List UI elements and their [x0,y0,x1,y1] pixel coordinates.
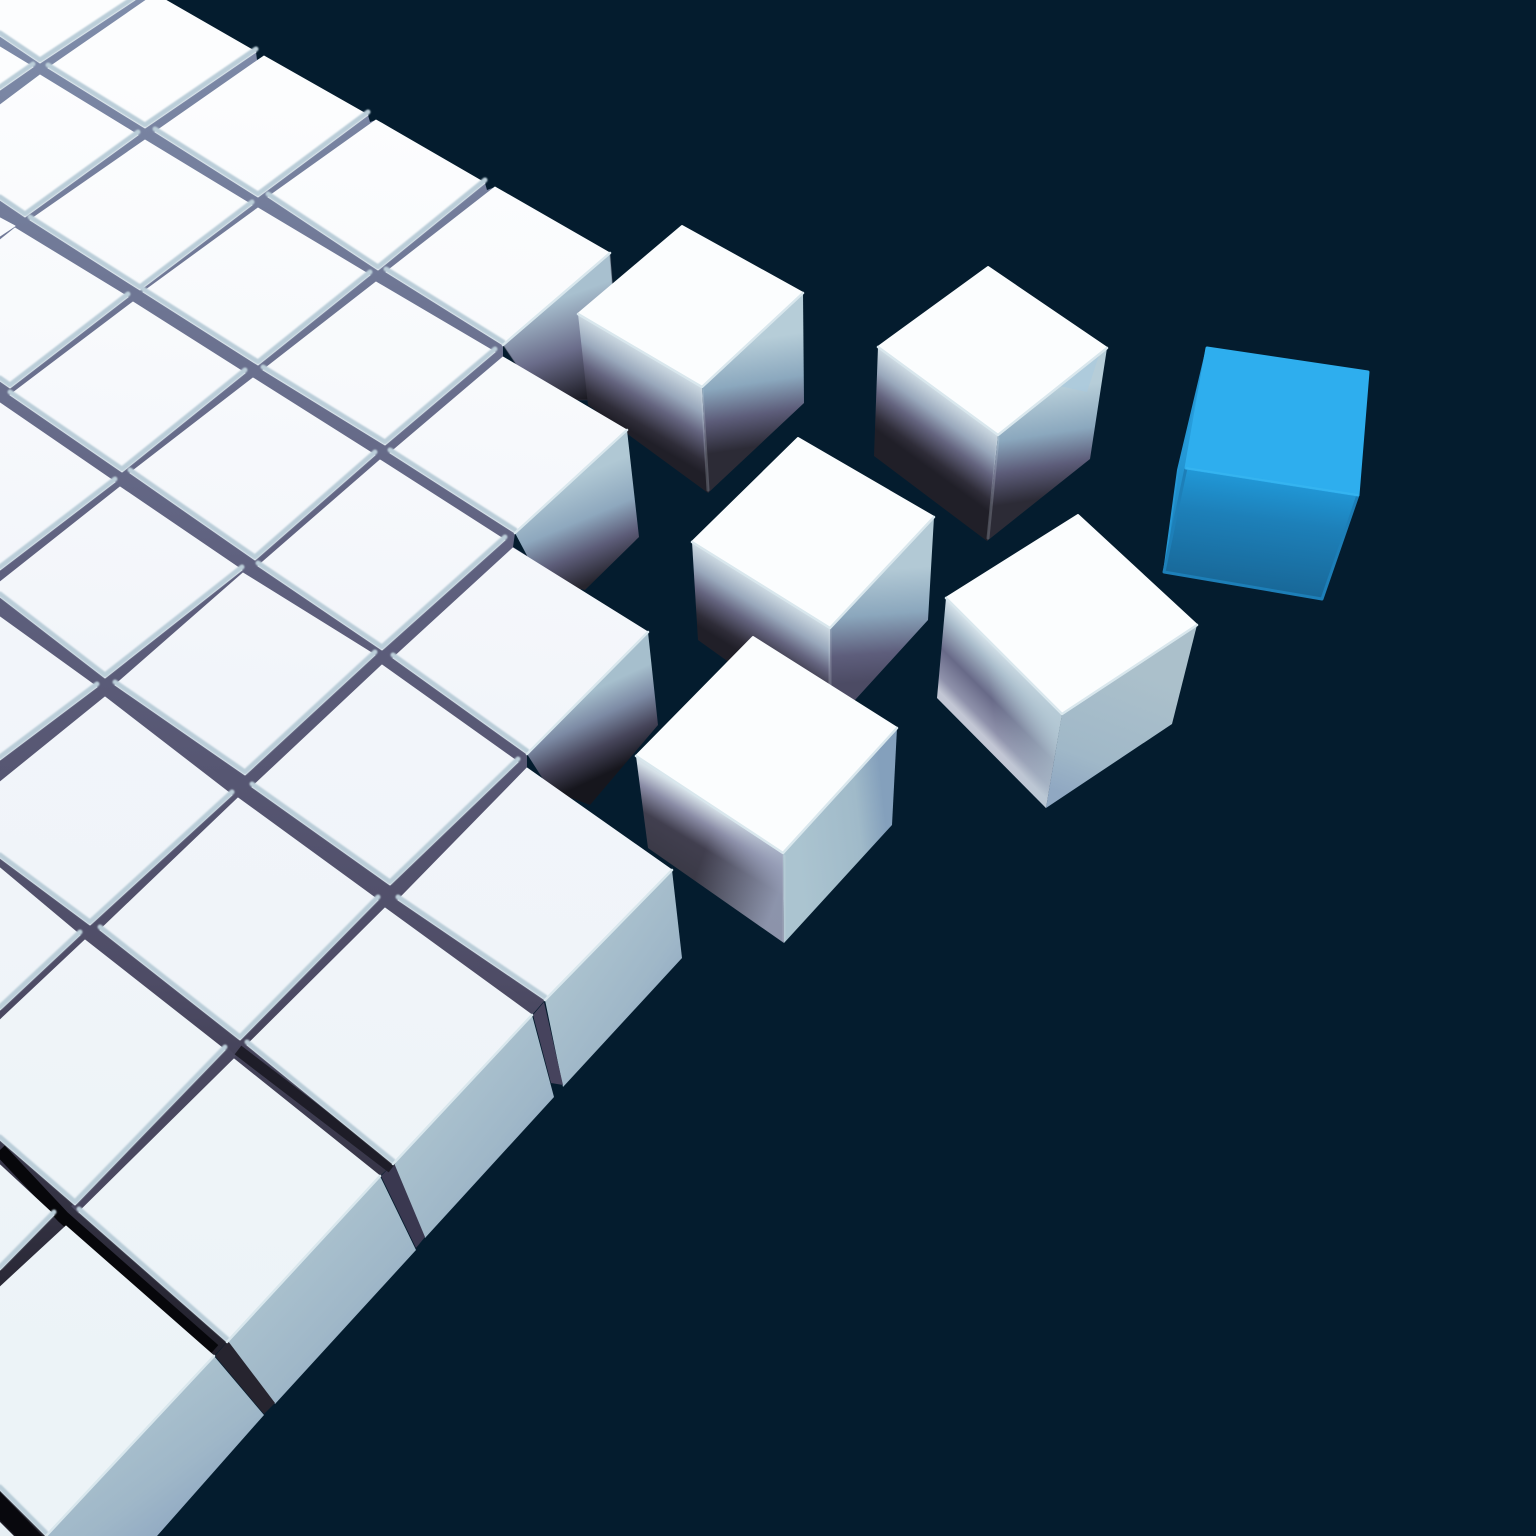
blue cube [1164,348,1368,599]
floating cube 1 [578,226,804,493]
grid tops: row B [0,47,627,533]
grid tops: row A [0,0,610,345]
grid tops: row E [0,617,532,1164]
grid cube sides: front row [46,870,682,1536]
floating cube 5 [636,637,897,943]
floating cube 4 [937,515,1197,808]
grid cube side: second row end [515,430,639,590]
grid tops: row G [0,1165,214,1536]
deep shadow channels between lower rows [0,1050,392,1350]
grid tops: row D [0,403,672,1000]
grid tops: row C [0,218,648,754]
grid cube side: third row end [527,632,658,805]
corner cube side face [503,253,613,400]
bottom-left corner shadow and cube sliver [0,1492,42,1536]
grid tops: row F [0,868,380,1342]
floating cube 2 [874,267,1107,541]
grid gaps: dark channels beneath the cube tops [0,0,672,1536]
floating cube 3 [692,438,934,735]
